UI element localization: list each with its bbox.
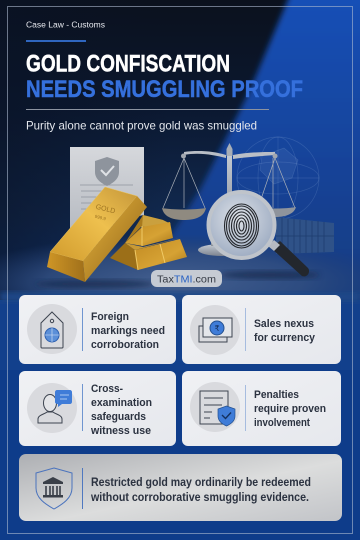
illustration: shipping containers <box>276 217 334 254</box>
divider <box>26 109 269 110</box>
card: penalties <box>182 371 341 446</box>
card: cross-examination <box>19 371 176 446</box>
card text: examination <box>91 397 152 409</box>
title <box>26 50 303 103</box>
card text: Sales nexus <box>254 318 314 330</box>
card text: witness use <box>90 425 151 437</box>
callout text: Restricted gold may ordinarily be redeemed <box>91 477 311 489</box>
illustration: large gold bar: 999.9 <box>94 214 107 221</box>
card text: corroboration <box>91 339 159 351</box>
icon: person with speech bubble <box>27 383 77 433</box>
logo badge <box>151 270 222 287</box>
card: foreign markings <box>19 295 176 364</box>
card text: involvement <box>254 417 310 429</box>
title: GOLD CONFISCATION <box>26 50 230 78</box>
card text: safeguards <box>91 411 146 423</box>
card text: for currency <box>254 332 316 344</box>
card text: Penalties <box>254 389 299 401</box>
subtitle: Purity alone cannot prove gold was smuggled <box>26 118 257 132</box>
illustration: large gold bar: GOLD <box>95 204 116 215</box>
illustration: magnifying glass with fingerprint <box>208 192 309 276</box>
accent rule <box>26 40 86 42</box>
illustration: certificate document <box>70 147 144 228</box>
illustration: stacked gold bars <box>110 215 187 270</box>
category label: Case Law - Customs <box>26 20 105 30</box>
illustration: large gold bar <box>47 187 147 282</box>
icon: rupee banknotes: ₹ <box>214 324 220 333</box>
icon: rupee banknotes <box>190 305 240 355</box>
illustration: globe <box>237 137 319 219</box>
card text: markings need <box>91 325 165 337</box>
icon: shield with bank building <box>36 468 72 509</box>
card text: require proven <box>254 403 326 415</box>
card text: Cross- <box>91 383 123 395</box>
card text: Foreign <box>91 311 129 323</box>
title: NEEDS SMUGGLING PROOF <box>26 76 303 103</box>
icon: document with shield <box>190 382 240 432</box>
illustration: scales of justice <box>162 143 296 256</box>
logo badge: TaxTMI.com <box>157 274 216 286</box>
icon: price tag with globe <box>27 304 77 354</box>
callout: restricted gold <box>19 454 342 521</box>
card: sales nexus <box>182 295 341 364</box>
callout text: without corroborative smuggling evidence. <box>90 492 309 504</box>
